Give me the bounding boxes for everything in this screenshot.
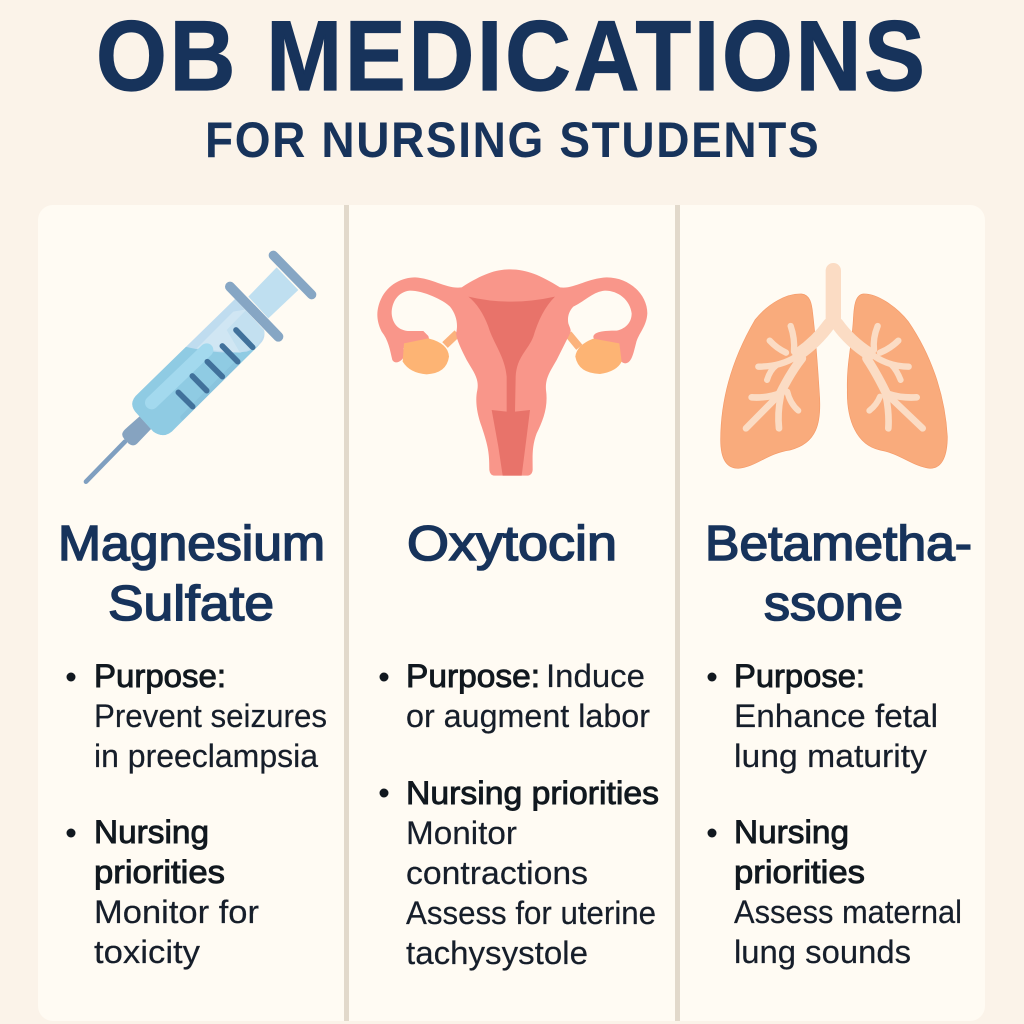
text block: magnesium sulfate bullets: in preeclampsia <box>94 738 318 774</box>
text block: oxytocin bullets: Nursing priorities <box>406 775 659 811</box>
text block: magnesium sulfate bullets <box>66 658 327 970</box>
text block: betamethasone bullets: Enhance fetal <box>734 698 938 734</box>
text block: oxytocin bullets: Induce <box>546 658 645 694</box>
heading: magnesium sulfate: Sulfate <box>108 577 274 631</box>
text block: betamethasone bullets <box>708 658 962 970</box>
heading: magnesium sulfate <box>58 517 325 631</box>
panel: oxytocin <box>377 269 659 971</box>
icon: uterus <box>377 269 647 476</box>
text block: betamethasone bullets: lung maturity <box>734 738 927 774</box>
icon: syringe <box>86 255 312 482</box>
text block: oxytocin bullets: Monitor <box>406 815 517 851</box>
panel: betamethasone <box>705 271 972 970</box>
title: OB MEDICATIONS <box>96 2 925 112</box>
text block: magnesium sulfate bullets: Prevent seizures <box>94 698 327 734</box>
text block: magnesium sulfate bullets: priorities <box>94 854 225 890</box>
text block: oxytocin bullets: tachysystole <box>406 935 588 971</box>
text block: magnesium sulfate bullets: toxicity <box>94 934 200 970</box>
heading: betamethasone <box>705 517 972 631</box>
text block: betamethasone bullets: Nursing <box>734 814 849 850</box>
text block: betamethasone bullets: Assess maternal <box>734 894 962 930</box>
text block: oxytocin bullets: or augment labor <box>406 698 650 734</box>
subtitle: FOR NURSING STUDENTS <box>205 113 819 168</box>
text block: magnesium sulfate bullets: Purpose: <box>94 658 226 694</box>
icon: lungs <box>721 271 947 468</box>
heading: betamethasone: ssone <box>764 577 903 631</box>
text block: magnesium sulfate bullets: Monitor for <box>94 894 259 930</box>
text block: betamethasone bullets: Purpose: <box>734 658 865 694</box>
text block: betamethasone bullets: priorities <box>734 854 865 890</box>
text block: oxytocin bullets: Purpose: <box>406 658 540 694</box>
panel: magnesium sulfate <box>58 255 327 970</box>
text block: magnesium sulfate bullets: Nursing <box>94 814 209 850</box>
heading: betamethasone: Betametha- <box>705 517 972 571</box>
panel: card background <box>38 205 985 1021</box>
text block: betamethasone bullets: lung sounds <box>734 934 911 970</box>
text block: oxytocin bullets <box>380 658 659 971</box>
heading: oxytocin: Oxytocin <box>407 517 617 571</box>
heading: magnesium sulfate: Magnesium <box>58 517 325 571</box>
text block: oxytocin bullets: Assess for uterine <box>406 895 656 931</box>
text block: oxytocin bullets: contractions <box>406 855 588 891</box>
